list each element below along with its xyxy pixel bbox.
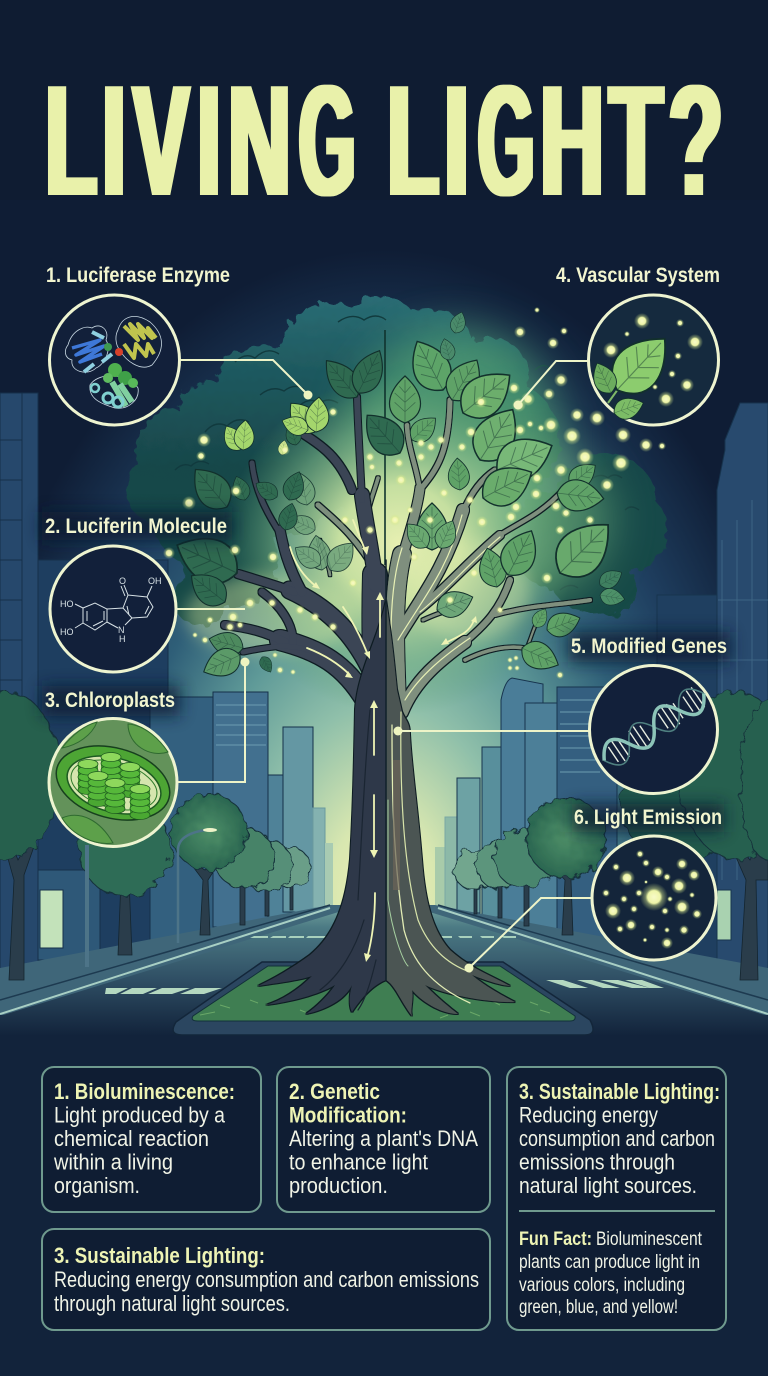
left dark branches bbox=[225, 397, 376, 700]
panel: bioluminescence: 1. Bioluminescence: bbox=[54, 1079, 235, 1104]
panel: sustainable lighting and fun fact: consumption and carbon bbox=[519, 1126, 715, 1151]
panel: genetic modification: Modification: bbox=[289, 1102, 407, 1128]
title bbox=[45, 51, 723, 230]
sidewalks and road bbox=[0, 898, 768, 1037]
panel: genetic modification bbox=[277, 1067, 490, 1212]
title: G bbox=[299, 54, 355, 230]
trunk bark lines bbox=[320, 560, 470, 1010]
callout labels bbox=[45, 264, 727, 829]
pale background leaves bbox=[286, 471, 361, 577]
scalloped canopy shading bbox=[175, 316, 639, 590]
icon: luciferin molecule: OH bbox=[148, 576, 162, 586]
icon: luciferin molecule: HO bbox=[60, 599, 74, 609]
right light leaves bbox=[389, 310, 626, 677]
night sky glow bbox=[0, 200, 768, 1050]
flow arrows bbox=[290, 520, 477, 962]
right grey branches bbox=[395, 400, 590, 712]
icon: chloroplast bbox=[48, 718, 178, 846]
icon: luciferin molecule: N bbox=[118, 625, 124, 635]
panel: sustainable lighting wide: through natural light sources. bbox=[54, 1291, 290, 1316]
panel: sustainable lighting and fun fact: various colors, including bbox=[519, 1275, 685, 1296]
callout labels: 5. Modified Genes bbox=[571, 635, 727, 658]
panel: genetic modification: to enhance light bbox=[289, 1150, 428, 1174]
title: H bbox=[540, 53, 604, 230]
central glow behind the branches bbox=[185, 330, 610, 715]
title: ? bbox=[668, 53, 723, 229]
panel: sustainable lighting and fun fact: 3. Sustainable Lighting: bbox=[519, 1079, 720, 1104]
title: T bbox=[609, 53, 663, 230]
panel: sustainable lighting wide: 3. Sustainable Lighting: bbox=[54, 1243, 265, 1268]
median with grass bbox=[173, 962, 593, 1035]
callout labels: 2. Luciferin Molecule bbox=[45, 515, 227, 538]
panel: bioluminescence: Light produced by a bbox=[54, 1102, 226, 1128]
title: L bbox=[387, 52, 439, 229]
label shadows bbox=[42, 512, 730, 832]
left dark leaves bbox=[168, 344, 412, 684]
title: I bbox=[102, 52, 126, 229]
panel: sustainable lighting and fun fact: Fun Fact: bbox=[519, 1229, 592, 1250]
callout labels: 6. Light Emission bbox=[574, 806, 722, 829]
title: I bbox=[197, 52, 221, 229]
icon: luciferin molecule: HO bbox=[60, 627, 74, 637]
panel: bioluminescence: within a living bbox=[53, 1150, 173, 1174]
panel: genetic modification: Altering a plant's DNA bbox=[289, 1126, 478, 1151]
background street trees bbox=[0, 691, 768, 980]
panel: sustainable lighting wide: Reducing energy consumption and carbon emissions bbox=[54, 1267, 479, 1292]
callout labels: 1. Luciferase Enzyme bbox=[46, 264, 230, 287]
city buildings right bbox=[435, 403, 768, 985]
callout labels: 4. Vascular System bbox=[556, 264, 720, 287]
panel: sustainable lighting and fun fact bbox=[507, 1067, 726, 1330]
panel: sustainable lighting and fun fact: natural light sources. bbox=[519, 1173, 697, 1198]
panel: sustainable lighting wide bbox=[42, 1229, 490, 1330]
icon: light emission bbox=[592, 836, 716, 960]
title: V bbox=[133, 51, 189, 229]
panel: genetic modification: 2. Genetic bbox=[289, 1079, 380, 1104]
panel: bioluminescence: chemical reaction bbox=[54, 1126, 209, 1151]
icon: DNA helix bbox=[590, 666, 718, 794]
title: G bbox=[478, 54, 534, 230]
panel: bioluminescence bbox=[42, 1067, 261, 1212]
panel: bioluminescence: organism. bbox=[54, 1173, 140, 1198]
panel: sustainable lighting and fun fact: emissions through bbox=[519, 1150, 675, 1174]
city buildings left bbox=[0, 393, 333, 983]
street lamps bbox=[87, 828, 217, 967]
icon: luciferin molecule: H bbox=[119, 634, 126, 644]
bottom background bbox=[0, 1036, 768, 1376]
panel: sustainable lighting and fun fact: plants can produce light in bbox=[519, 1252, 700, 1273]
panel: genetic modification: production. bbox=[289, 1173, 388, 1198]
sap lines in right branches bbox=[391, 515, 500, 720]
tree canopy bbox=[126, 296, 668, 626]
panel: sustainable lighting and fun fact: Reducing energy bbox=[519, 1102, 658, 1128]
tree trunk bbox=[258, 600, 515, 1016]
panel: sustainable lighting and fun fact: green, blue, and yellow! bbox=[519, 1297, 678, 1318]
icon: luciferin molecule bbox=[50, 546, 176, 672]
icon: luciferin molecule: O bbox=[119, 576, 126, 586]
title: I bbox=[444, 54, 469, 229]
title: L bbox=[45, 52, 97, 229]
callout labels: 3. Chloroplasts bbox=[45, 689, 175, 712]
title: N bbox=[228, 52, 291, 228]
pale background branches bbox=[318, 478, 378, 575]
glowing particles bbox=[163, 307, 666, 679]
icon: vascular system leaf bbox=[587, 295, 718, 425]
centre dividing line bbox=[384, 330, 386, 565]
bright glowing left leaves bbox=[218, 395, 331, 456]
icon: luciferase enzyme bbox=[50, 295, 180, 425]
leader end dots bbox=[240, 390, 522, 972]
leader lines bbox=[177, 360, 591, 968]
panel: sustainable lighting and fun fact: Bioluminescent bbox=[596, 1229, 703, 1250]
